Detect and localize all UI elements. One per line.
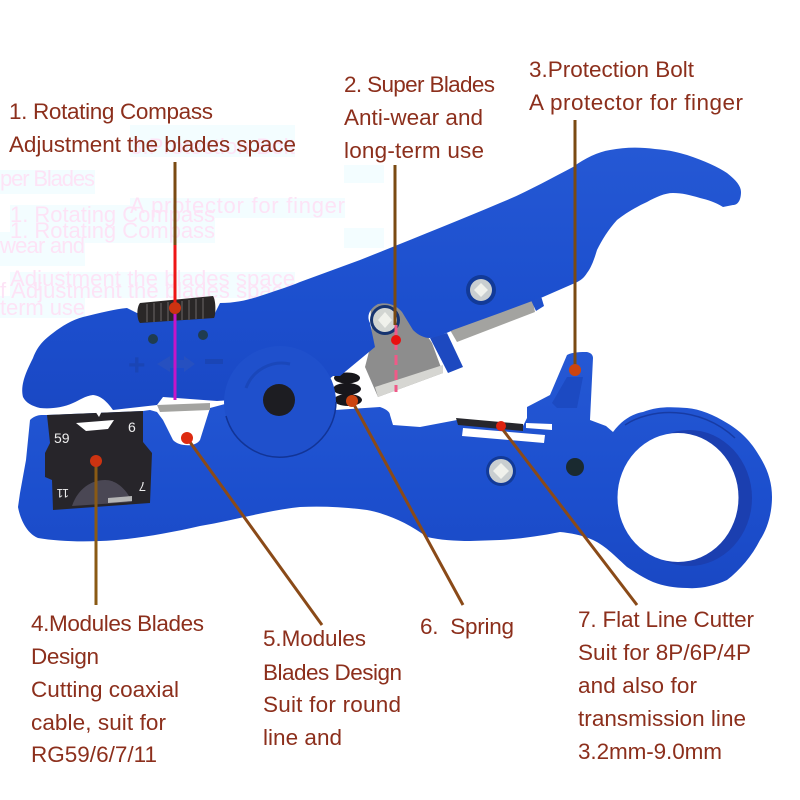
lower arm and ring handle (18, 352, 772, 588)
ghost text artefacts: per Blades (0, 166, 95, 191)
label 2: super blades: 2. Super Blades (344, 72, 495, 97)
blade screw (370, 305, 400, 335)
upper arm (22, 148, 741, 410)
label 7: flat line cutter: Suit for 8P/6P/4P (578, 640, 751, 665)
black module: 7 (139, 479, 146, 494)
pivot disc (224, 346, 336, 458)
dark pins (148, 334, 158, 344)
label 7: flat line cutter: 7. Flat Line Cutter (578, 607, 754, 632)
blade holder tab (430, 333, 463, 373)
upper screw (466, 275, 496, 305)
ghost text artefacts (0, 125, 384, 320)
label 4: modules blades: 4.Modules Blades (31, 611, 204, 636)
lower screw (486, 456, 516, 486)
label 3: protection bolt (529, 57, 744, 115)
label 7: flat line cutter: 3.2mm-9.0mm (578, 739, 722, 764)
finger guard recess (552, 377, 583, 408)
label 7: flat line cutter: transmission line (578, 706, 746, 731)
ghost text artefacts: term use (0, 295, 85, 320)
label 7: flat line cutter: and also for (578, 673, 698, 698)
ghost text artefacts: 3.Protection Bolt (130, 134, 295, 159)
jaw blade strip (157, 403, 210, 412)
label 3: protection bolt: 3.Protection Bolt (529, 57, 695, 82)
label 2: super blades (344, 72, 495, 163)
ghost text artefacts: A protector for finger (130, 193, 345, 218)
label 2: super blades: long-term use (344, 138, 484, 163)
super blade (365, 298, 443, 397)
label 6: spring: 6. Spring (420, 614, 514, 639)
ghost text artefacts: wear and (0, 233, 85, 258)
label 1: rotating compass: 1. Rotating Compass (9, 99, 213, 124)
label 3: protection bolt: A protector for finger (529, 90, 744, 115)
label 4: modules blades (31, 611, 204, 767)
label 4: modules blades: Cutting coaxial (31, 677, 179, 702)
blade tab (530, 296, 544, 311)
label 4: modules blades: Design (31, 644, 99, 669)
label 4: modules blades: cable, suit for (31, 710, 166, 735)
label 5: modules blades design: Suit for round (263, 692, 401, 717)
rotating compass knob (137, 296, 215, 323)
label 4: modules blades: RG59/6/7/11 (31, 742, 157, 767)
ring hole (618, 433, 738, 562)
spring (333, 372, 362, 406)
jaw markings: + (128, 349, 146, 382)
black module (45, 411, 152, 510)
ring inner shading (626, 430, 752, 566)
label 1: rotating compass (9, 99, 296, 157)
ghost text artefacts: 1. Rotating Compass (10, 218, 215, 243)
ghost text artefacts: Adjustment the blades space (10, 266, 295, 291)
label 2: super blades: Anti-wear and (344, 105, 483, 130)
label 5: modules blades design (263, 626, 402, 750)
ring rim highlight (625, 413, 735, 438)
black module: 6 (128, 419, 136, 435)
label 5: modules blades design: line and (263, 725, 342, 750)
wire stripper tool (18, 148, 772, 588)
label 5: modules blades design: 5.Modules (263, 626, 366, 651)
rear blade strip (450, 297, 535, 342)
callout lines (90, 120, 637, 625)
label 1: rotating compass: Adjustment the blades space (9, 132, 296, 157)
ghost text artefacts: f Adjustment the blades space (0, 278, 295, 303)
flat line cutter slot (456, 418, 552, 443)
label 5: modules blades design: Blades Design (263, 660, 402, 685)
label 7: flat line cutter (578, 607, 754, 764)
ghost text artefacts: 1. Rotating Compass (10, 202, 215, 227)
black module: 11 (56, 486, 69, 500)
black module: 59 (54, 430, 70, 446)
